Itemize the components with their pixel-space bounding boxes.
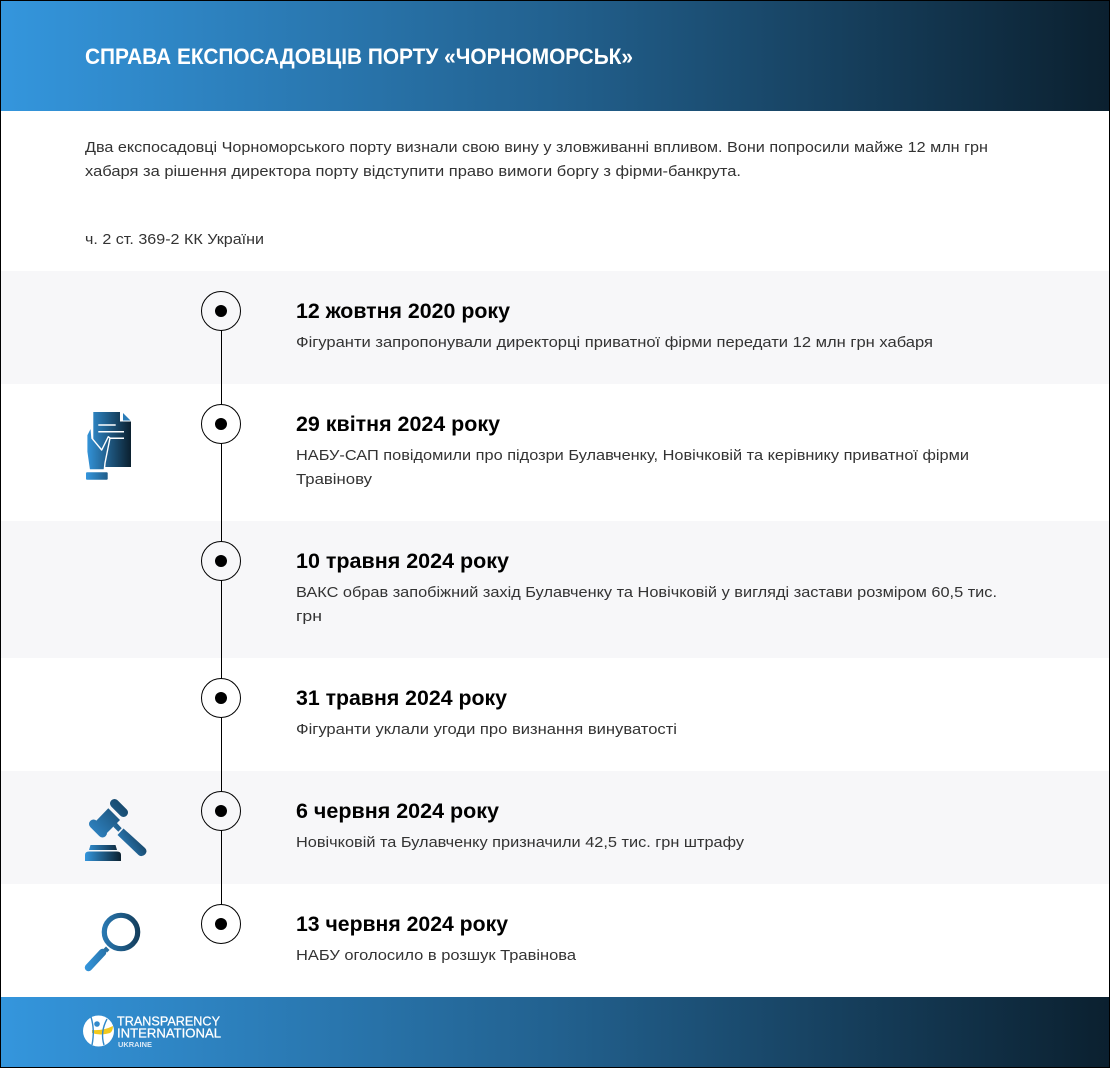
timeline marker 3 <box>202 542 240 580</box>
footer banner <box>0 997 1110 1068</box>
icon: judge gavel <box>85 804 146 861</box>
event 3: грн <box>296 608 322 625</box>
event 4: 31 травня 2024 року <box>296 687 507 710</box>
event 1: Фігуранти запропонували директорці приватної фірми передати 12 млн грн хабаря <box>296 334 933 351</box>
timeline marker 4 <box>202 678 240 718</box>
event 1 <box>296 300 933 351</box>
event 4: Фігуранти уклали угоди про визнання винуватості <box>296 721 677 738</box>
logo: Transparency International Ukraine: INTERNATIONAL <box>117 1026 221 1040</box>
event 6: НАБУ оголосило в розшук Травінова <box>296 947 577 964</box>
event 2: НАБУ-САП повідомили про підозри Булавченку, Новічковій та керівнику приватної фірми <box>296 447 969 464</box>
event 6: 13 червня 2024 року <box>296 913 508 936</box>
timeline line <box>220 311 222 924</box>
timeline marker 6 <box>202 904 240 944</box>
intro text <box>85 139 988 180</box>
icon: document in hand <box>86 412 131 480</box>
legal article reference: ч. 2 ст. 369-2 КК України <box>85 231 264 248</box>
event 5 <box>296 800 745 851</box>
event 5: 6 червня 2024 року <box>296 800 499 823</box>
event 2: 29 квітня 2024 року <box>296 413 500 436</box>
timeline marker 2 <box>202 404 240 444</box>
intro text: Два експосадовці Чорноморського порту визнали свою вину у зловживанні впливом. Вони попросили майже 12 млн грн <box>85 139 988 156</box>
event 2: Травінову <box>296 471 373 488</box>
event 6 <box>296 913 577 964</box>
event 3: 10 травня 2024 року <box>296 550 509 573</box>
logo: Transparency International Ukraine: UKRAINE <box>118 1042 152 1049</box>
icon: magnifying glass <box>88 915 138 968</box>
title: СПРАВА ЕКСПОСАДОВЦІВ ПОРТУ «ЧОРНОМОРСЬК» <box>85 44 633 69</box>
intro text: хабаря за рішення директора порту відступити право вимоги боргу з фірми-банкрута. <box>85 163 741 180</box>
row 5 background <box>0 771 1110 884</box>
logo: Transparency International Ukraine: TRANSPARENCY <box>117 1014 221 1028</box>
timeline marker 5 <box>202 792 240 830</box>
header banner <box>0 0 1110 111</box>
logo: Transparency International Ukraine <box>83 1014 221 1049</box>
event 4 <box>296 687 677 738</box>
event 3 <box>296 550 997 625</box>
row 3 background <box>0 521 1110 658</box>
timeline marker 1 <box>202 292 240 330</box>
event 2 <box>296 413 969 488</box>
event 5: Новічковій та Булавченку призначили 42,5 тис. грн штрафу <box>296 834 745 851</box>
event 3: ВАКС обрав запобіжний захід Булавченку та Новічковій у вигляді застави розміром 60,5 тис. <box>296 584 997 601</box>
event 1: 12 жовтня 2020 року <box>296 300 510 323</box>
row 1 background <box>0 271 1110 384</box>
